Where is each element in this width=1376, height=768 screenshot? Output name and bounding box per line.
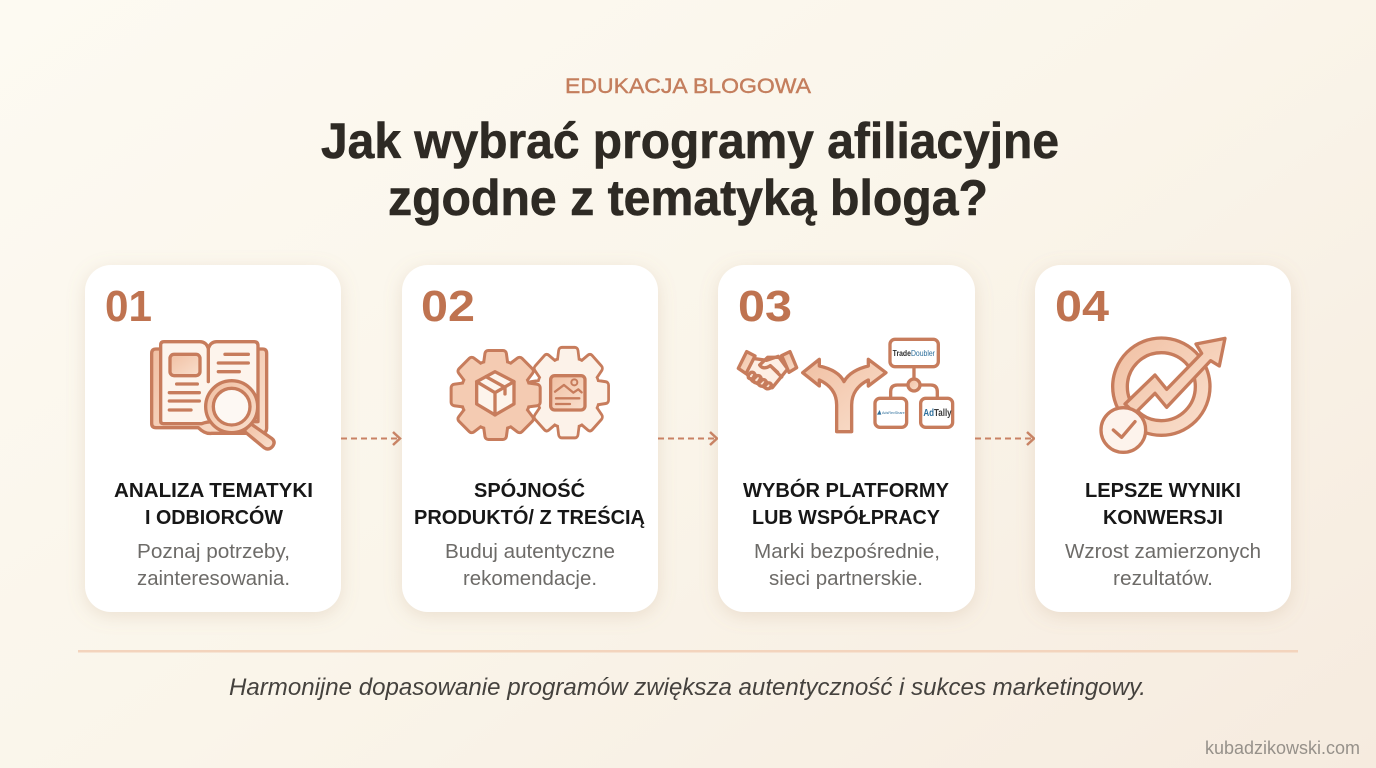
description: Wzrost zamierzonych [1065,540,1261,563]
description: sieci partnerskie. [769,567,923,590]
partner box: TradeDoubler: TradeDoubler [893,348,935,358]
box [477,372,514,415]
partner box: AdTally [921,398,953,427]
icon: two gears [455,351,605,436]
description: rezultatów. [1113,567,1213,590]
card background [402,265,658,612]
panel: step 3 [718,265,975,612]
heading: LUB WSPÓŁPRACY [752,505,941,529]
description: zainteresowania. [137,567,290,590]
step number: 03 [738,282,792,331]
check badge [1101,408,1146,452]
heading: KONWERSJI [1103,507,1223,529]
arrow: step 1 to 2 [341,432,400,445]
fork arrow [803,359,886,432]
step number: 01 [105,282,152,331]
partner box: TradeDoubler [890,339,938,367]
closing statement: Harmonijne dopasowanie programów zwiększa autentyczność i sukces marketingowy. [229,674,1146,701]
panel: step 2 [402,265,658,612]
icon: fork arrow and partner network [803,339,953,432]
heading: I ODBIORCÓW [145,505,283,529]
partner box: AdTally: AdTally [923,408,952,419]
description [445,540,615,590]
icon: handshake [738,352,797,389]
description: rekomendacje. [463,567,597,590]
description [137,540,290,590]
eyebrow label: EDUKACJA BLOGOWA [565,75,811,98]
heading: ANALIZA TEMATYKI [114,480,313,502]
partner box: small network [875,398,907,427]
description [1065,540,1261,590]
description: Buduj autentyczne [445,540,615,563]
description: Poznaj potrzeby, [137,540,290,563]
heading [1085,480,1241,529]
heading: LEPSZE WYNIKI [1085,480,1241,502]
arrow: step 2 to 3 [658,432,717,445]
heading: SPÓJNOŚĆ [474,478,585,502]
panel: step 1 [85,265,341,612]
title: Jak wybrać programy afiliacyjne [321,113,1059,169]
card background [718,265,975,612]
heading [114,480,313,529]
left gear [455,354,537,436]
step number: 04 [1055,282,1110,331]
arrow: step 3 to 4 [975,432,1034,445]
partner box: small network: AdsRevShare [882,411,905,415]
description: Marki bezpośrednie, [754,540,940,563]
description [754,540,940,590]
heading: PRODUKTÓ/ Z TREŚCIĄ [414,505,645,529]
network node [908,379,920,391]
icon: growth ring with arrow and check [1101,338,1225,452]
network connectors [891,367,937,398]
heading [743,478,950,529]
card background [1035,265,1291,612]
ring [1113,338,1210,435]
title [321,113,1059,226]
picture [551,376,585,410]
panel: step 4 [1035,265,1291,612]
heading: WYBÓR PLATFORMY [743,478,950,502]
step number: 02 [421,282,475,331]
heading [414,478,645,529]
right gear [531,351,605,434]
website credit: kubadzikowski.com [1205,738,1360,758]
card background [85,265,341,612]
icon: open book with magnifier [152,342,274,449]
growth arrow [1125,338,1225,413]
title: zgodne z tematyką bloga? [388,170,988,226]
